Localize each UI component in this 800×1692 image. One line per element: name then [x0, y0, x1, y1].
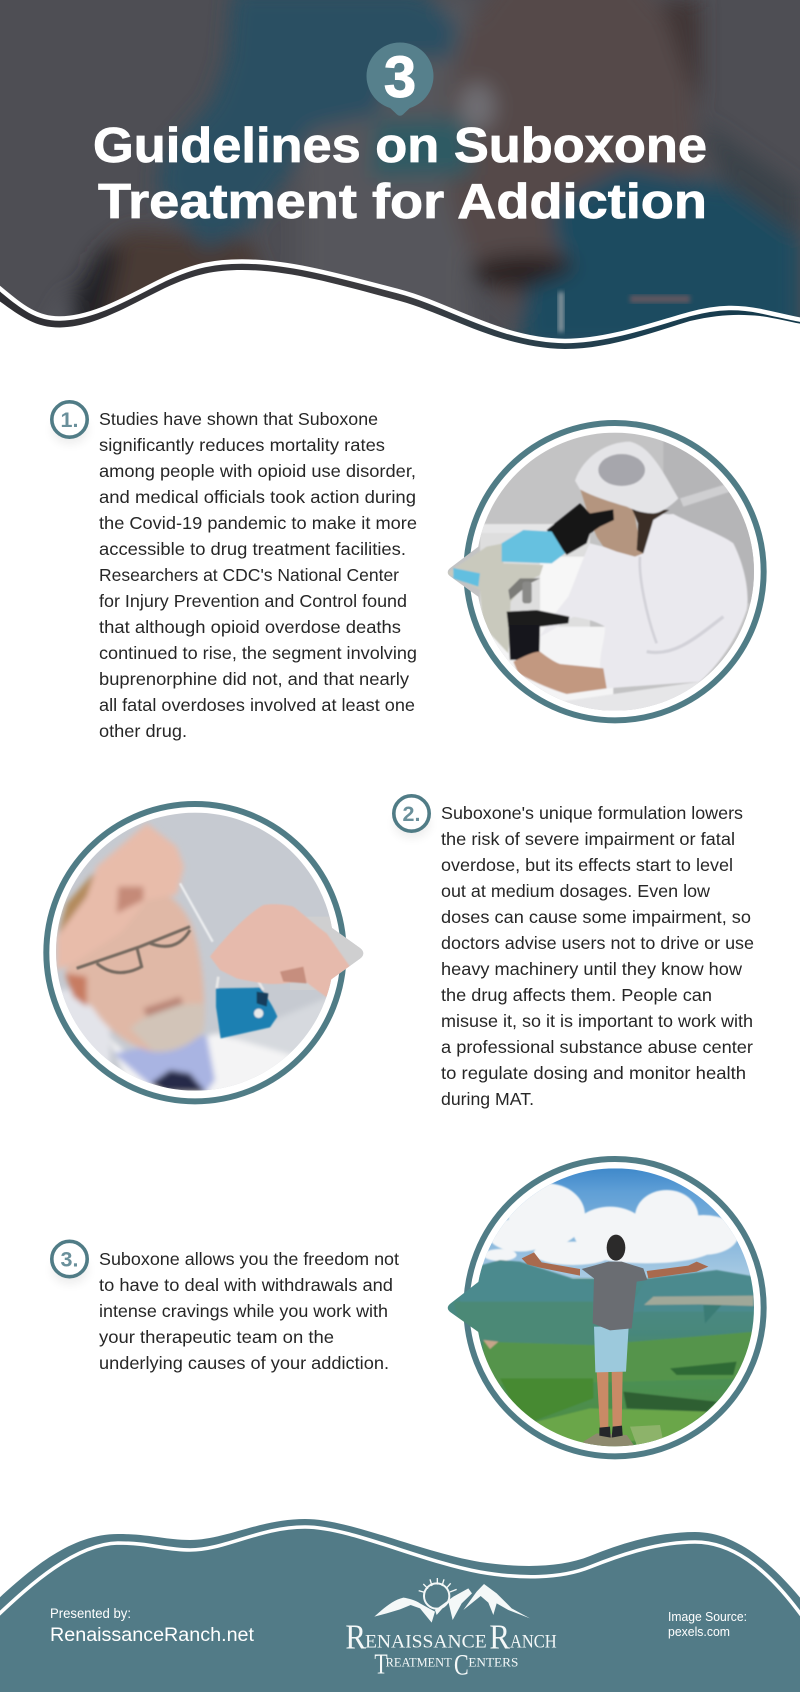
- text block 1: other drug.: [99, 721, 187, 741]
- text block 2: out at medium dosages. Even low: [441, 881, 710, 901]
- text block 1: all fatal overdoses involved at least one: [99, 695, 415, 715]
- text block 2: doctors advise users not to drive or use: [441, 933, 754, 953]
- logo wordmark: REATMENT: [386, 1656, 452, 1670]
- text block 2: doses can cause some impairment, so: [441, 907, 751, 927]
- text block 2: Suboxone's unique formulation lowers: [441, 803, 743, 823]
- presented by: Presented by:: [50, 1606, 131, 1621]
- presented by: RenaissanceRanch.net: [50, 1625, 255, 1646]
- logo wordmark: R: [489, 1618, 511, 1657]
- header banner: [0, 0, 800, 370]
- text block 3: intense cravings while you work with: [99, 1301, 388, 1321]
- blurred lab photo background: [0, 0, 800, 352]
- number badge 2: [394, 796, 430, 838]
- text block 1: continued to rise, the segment involving: [99, 643, 417, 663]
- number badge 3: 3.: [61, 1248, 78, 1272]
- text block 1: buprenorphine did not, and that nearly: [99, 669, 409, 689]
- title: Treatment for Addiction: [98, 175, 707, 229]
- logo wordmark: C: [454, 1650, 469, 1682]
- text block 2: the risk of severe impairment or fatal: [441, 829, 735, 849]
- title: [93, 119, 707, 229]
- number badge 2: 2.: [403, 802, 420, 826]
- text block 2: [441, 803, 754, 1109]
- text block 3: Suboxone allows you the freedom not: [99, 1249, 399, 1269]
- number badge: 3: 3: [384, 45, 416, 110]
- logo wordmark: T: [374, 1649, 388, 1680]
- text block 1: Researchers at CDC's National Center: [99, 565, 399, 585]
- title: Guidelines on Suboxone: [93, 119, 707, 173]
- text block 3: your therapeutic team on the: [99, 1327, 334, 1347]
- text block 2: a professional substance abuse center: [441, 1037, 753, 1057]
- text block 2: during MAT.: [441, 1089, 534, 1109]
- number badge: 3: [366, 42, 434, 116]
- text block 1: the Covid-19 pandemic to make it more: [99, 513, 417, 533]
- panel: guideline 1: [52, 402, 780, 741]
- image source: [668, 1610, 747, 1639]
- text block 1: that although opioid overdose deaths: [99, 617, 401, 637]
- text block 2: overdose, but its effects start to level: [441, 855, 733, 875]
- text block 1: for Injury Prevention and Control found: [99, 591, 407, 611]
- text block 2: the drug affects them. People can: [441, 985, 712, 1005]
- text block 2: to regulate dosing and monitor health: [441, 1063, 746, 1083]
- text block 1: and medical officials took action during: [99, 487, 416, 507]
- panel: guideline 3: [52, 1145, 780, 1465]
- footer: [0, 1519, 800, 1692]
- logo wordmark: R: [345, 1618, 367, 1657]
- text block 2: heavy machinery until they know how: [441, 959, 742, 979]
- logo wordmark: ENTERS: [468, 1656, 518, 1670]
- logo wordmark: ENAISSANCE: [365, 1631, 487, 1652]
- logo wordmark: [345, 1618, 557, 1682]
- wave divider: [0, 262, 800, 370]
- text block 2: misuse it, so it is important to work with: [441, 1011, 753, 1031]
- presented by: [50, 1606, 255, 1646]
- text block 1: [99, 409, 417, 741]
- footer wave background: [0, 1519, 800, 1692]
- number badge 1: 1.: [61, 408, 78, 432]
- photo: doctor inspecting flask: [43, 801, 364, 1104]
- text block 1: significantly reduces mortality rates: [99, 435, 385, 455]
- text block 1: Studies have shown that Suboxone: [99, 409, 378, 429]
- number badge 3: [52, 1241, 88, 1284]
- logo wordmark: ANCH: [510, 1631, 557, 1652]
- text block 3: [99, 1249, 399, 1373]
- text block 3: underlying causes of your addiction.: [99, 1353, 389, 1373]
- number badge 1: [52, 402, 88, 444]
- text block 3: to have to deal with withdrawals and: [99, 1275, 393, 1295]
- text block 1: accessible to drug treatment facilities.: [99, 539, 406, 559]
- image source: pexels.com: [668, 1625, 730, 1639]
- logo icon: sun and mountains: [374, 1578, 530, 1623]
- logo: [345, 1578, 557, 1682]
- panel: guideline 2: [30, 790, 754, 1110]
- image source: Image Source:: [668, 1610, 747, 1624]
- text block 1: among people with opioid use disorder,: [99, 461, 416, 481]
- photo: scientist at microscope: [448, 420, 767, 724]
- photo: man with open arms over valley: [448, 1156, 767, 1460]
